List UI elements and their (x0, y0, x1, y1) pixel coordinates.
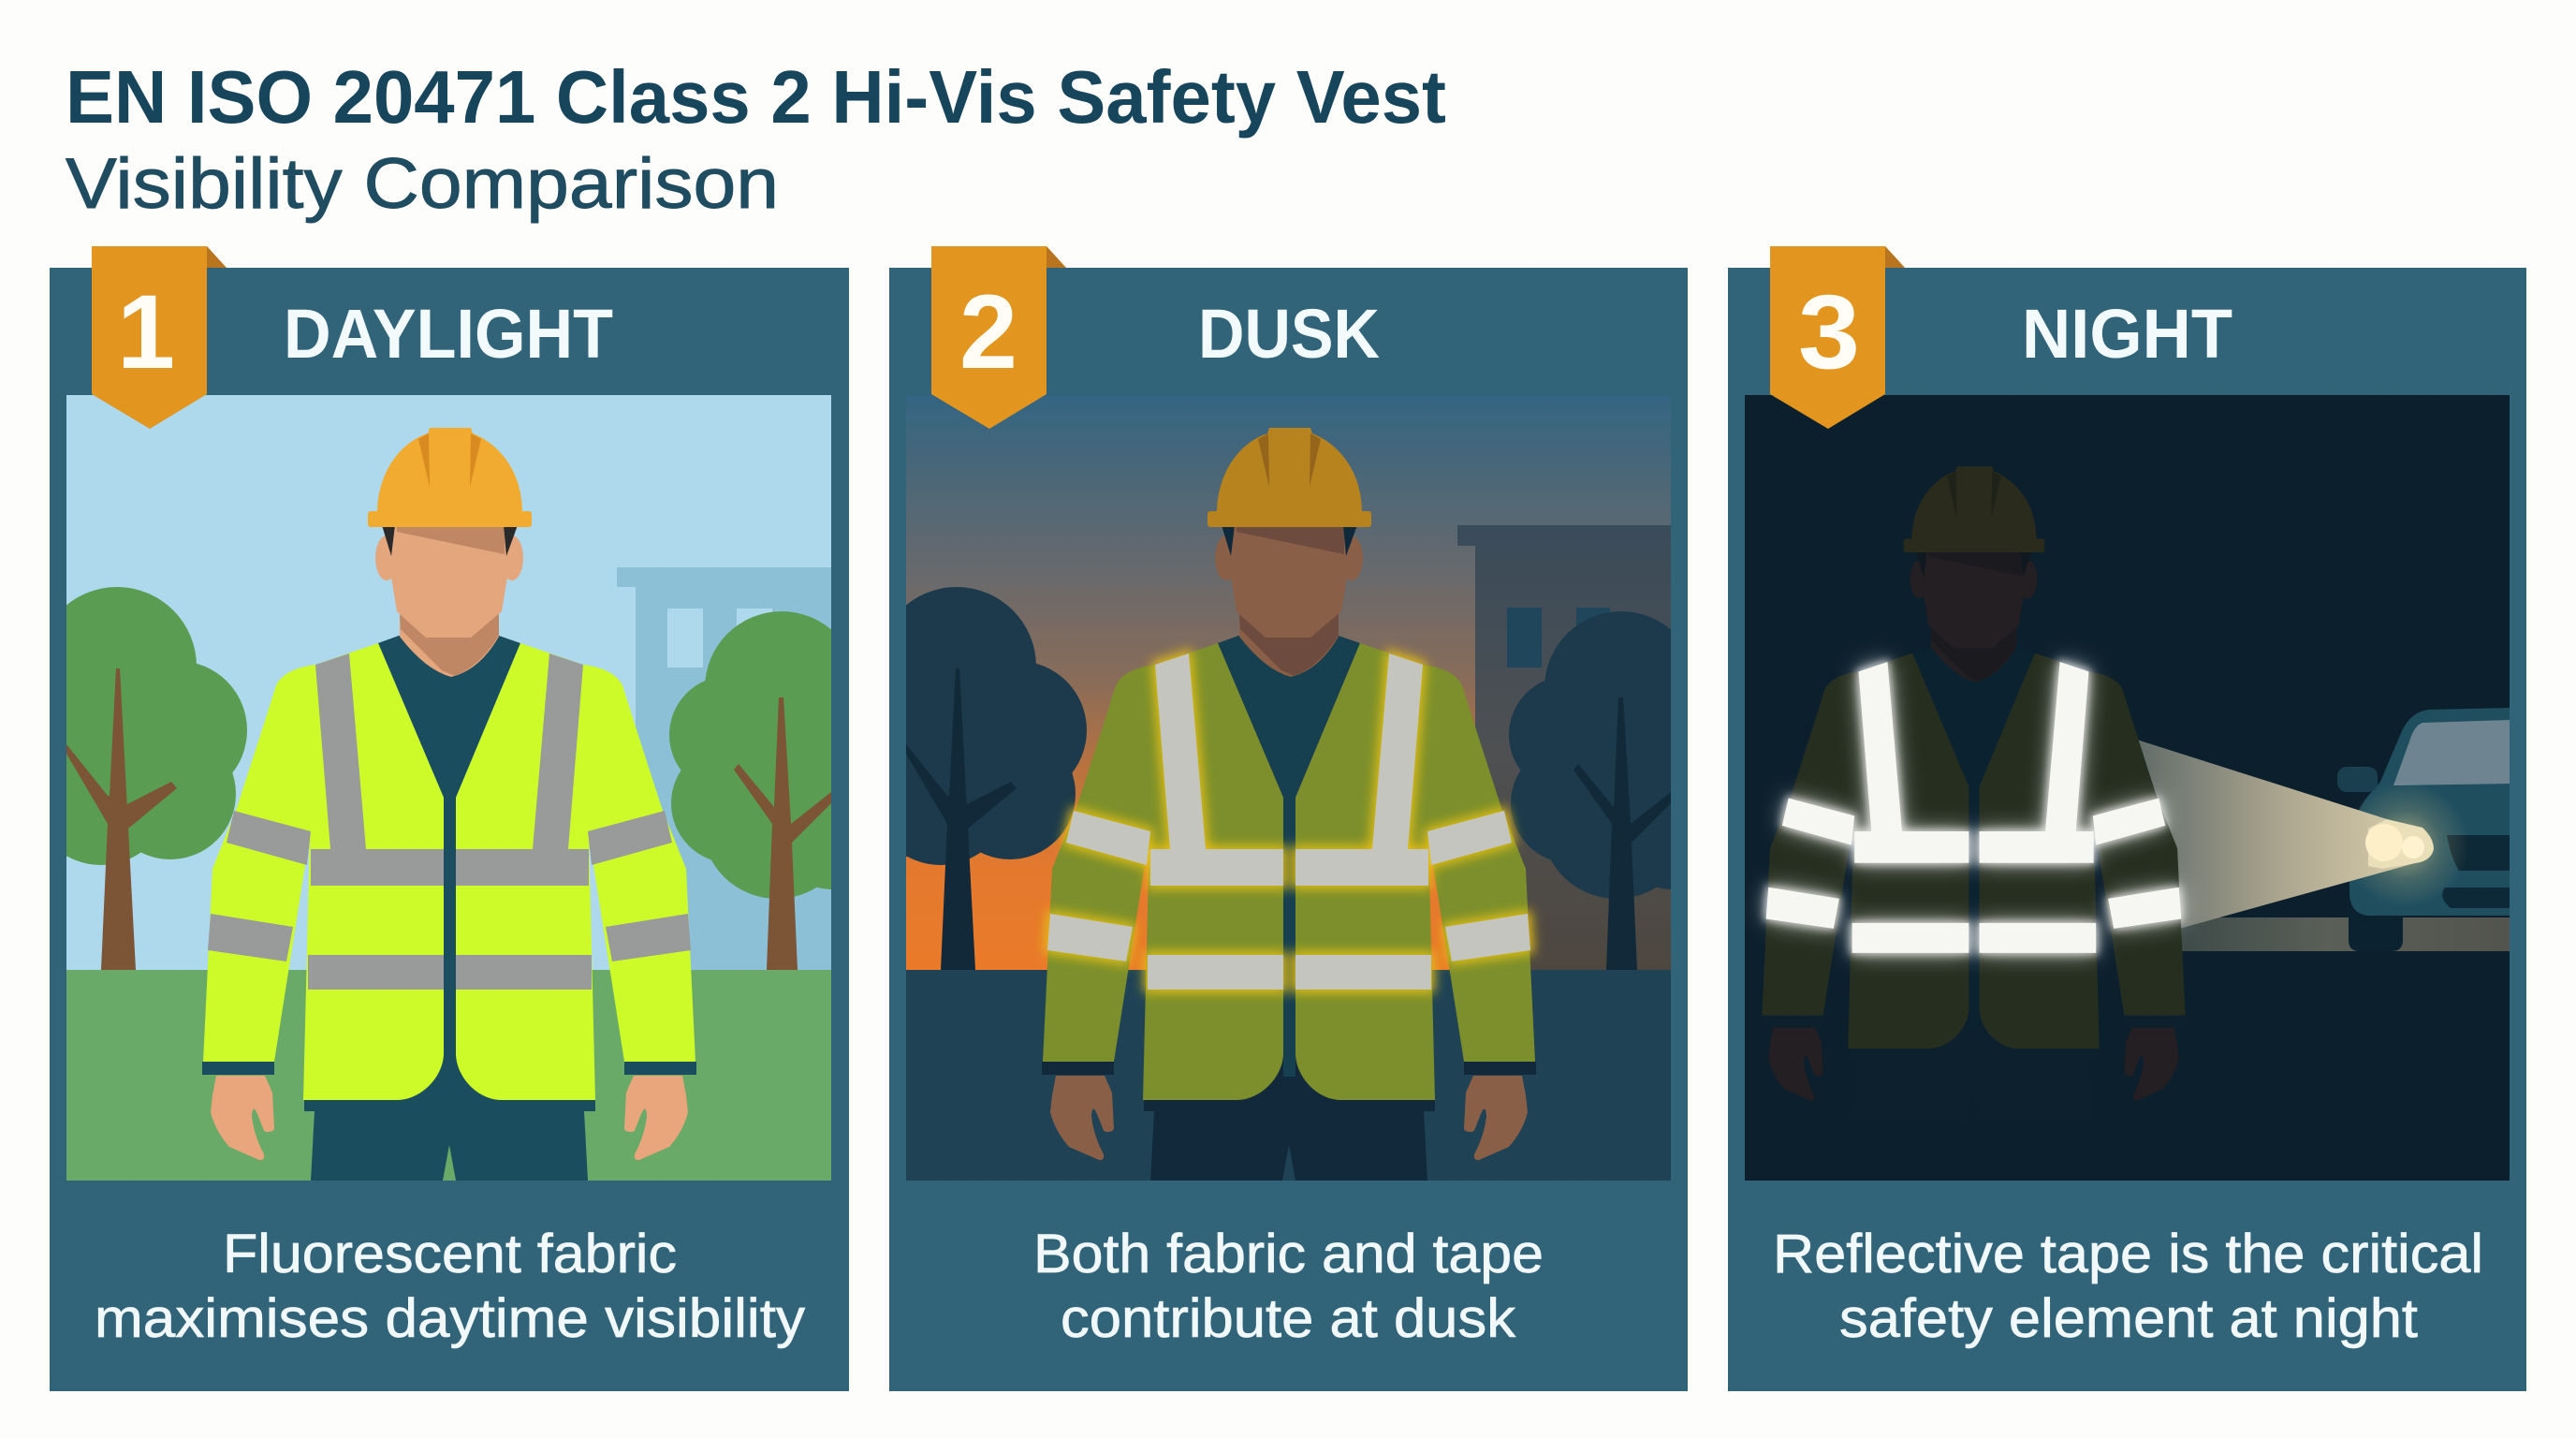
badge 2: 2 (959, 273, 1017, 390)
fluorescent jacket dimmed (1043, 643, 1535, 1100)
trousers and cuffs (202, 1049, 696, 1181)
title line 1: EN ISO 20471 Class 2 Hi-Vis Safety Vest (66, 55, 1446, 139)
badge 1 (92, 246, 227, 429)
head (1910, 550, 2037, 682)
hands (211, 1076, 688, 1160)
reflective tape (1047, 653, 1530, 990)
hands (1050, 1076, 1528, 1160)
worker at night (1761, 466, 2187, 1119)
tape wide glow (1766, 662, 2181, 953)
hard hat (368, 428, 532, 527)
caption: daylight: maximises daytime visibility (95, 1288, 805, 1349)
lit road strip (2153, 917, 2510, 951)
hands (1768, 1028, 2179, 1101)
shirt (1218, 636, 1360, 1077)
reflective tape (1766, 662, 2181, 953)
hard hat (1904, 466, 2044, 552)
heading: night: NIGHT (2022, 295, 2232, 373)
caption: dusk: contribute at dusk (1061, 1288, 1516, 1349)
caption: night (1773, 1224, 2483, 1349)
badge 3: 3 (1798, 273, 1860, 390)
worker in daylight (202, 428, 696, 1181)
panel: dusk (871, 246, 1738, 1391)
scene: daylight (66, 395, 831, 1181)
head (375, 524, 523, 677)
jacket in darkness (1762, 653, 2186, 1049)
tree right (1509, 611, 1738, 970)
headlight beam (2137, 740, 2415, 929)
caption: daylight (95, 1224, 805, 1349)
tree left (66, 587, 247, 970)
building (617, 567, 831, 970)
caption: dusk (1033, 1224, 1544, 1349)
tape tight glow (1766, 662, 2181, 953)
tape glow (1047, 653, 1530, 990)
badge 2 (931, 246, 1066, 429)
reflective tape (208, 653, 691, 990)
scene: night (1745, 395, 2510, 1181)
tree left (871, 587, 1087, 970)
trousers and cuffs (1042, 1049, 1536, 1181)
car (2337, 708, 2510, 951)
sky (66, 395, 831, 970)
heading: dusk: DUSK (1198, 295, 1380, 373)
card background (50, 268, 849, 1391)
building windows (1507, 608, 1610, 668)
caption: dusk: Both fabric and tape (1033, 1224, 1544, 1284)
fluorescent jacket (203, 643, 695, 1100)
head (1215, 524, 1363, 677)
dusk sky (906, 395, 1671, 1181)
ground (906, 970, 1671, 1181)
title (66, 55, 1446, 224)
building (1457, 525, 1671, 970)
shirt (378, 636, 520, 1077)
shirt (1912, 647, 2035, 1028)
heading: daylight: DAYLIGHT (284, 295, 613, 373)
worker at dusk (1042, 428, 1536, 1181)
ground (66, 970, 831, 1181)
headlights (2365, 819, 2434, 869)
badge 1: 1 (117, 273, 175, 390)
panel: daylight (32, 246, 899, 1391)
scene: dusk (906, 395, 1671, 1181)
trousers and cuffs (1761, 1004, 2187, 1119)
panel: night (1728, 246, 2526, 1391)
caption: night: Reflective tape is the critical (1773, 1224, 2483, 1284)
building windows (667, 609, 772, 668)
caption: daylight: Fluorescent fabric (223, 1224, 677, 1284)
tree right (669, 611, 831, 970)
card background (1728, 268, 2526, 1391)
title line 2: Visibility Comparison (66, 144, 779, 224)
headlight glow (2342, 781, 2469, 908)
night sky and ground (1745, 395, 2510, 1181)
caption: night: safety element at night (1839, 1288, 2418, 1349)
badge 3 (1770, 246, 1905, 429)
card background (889, 268, 1688, 1391)
hard hat (1208, 428, 1371, 527)
